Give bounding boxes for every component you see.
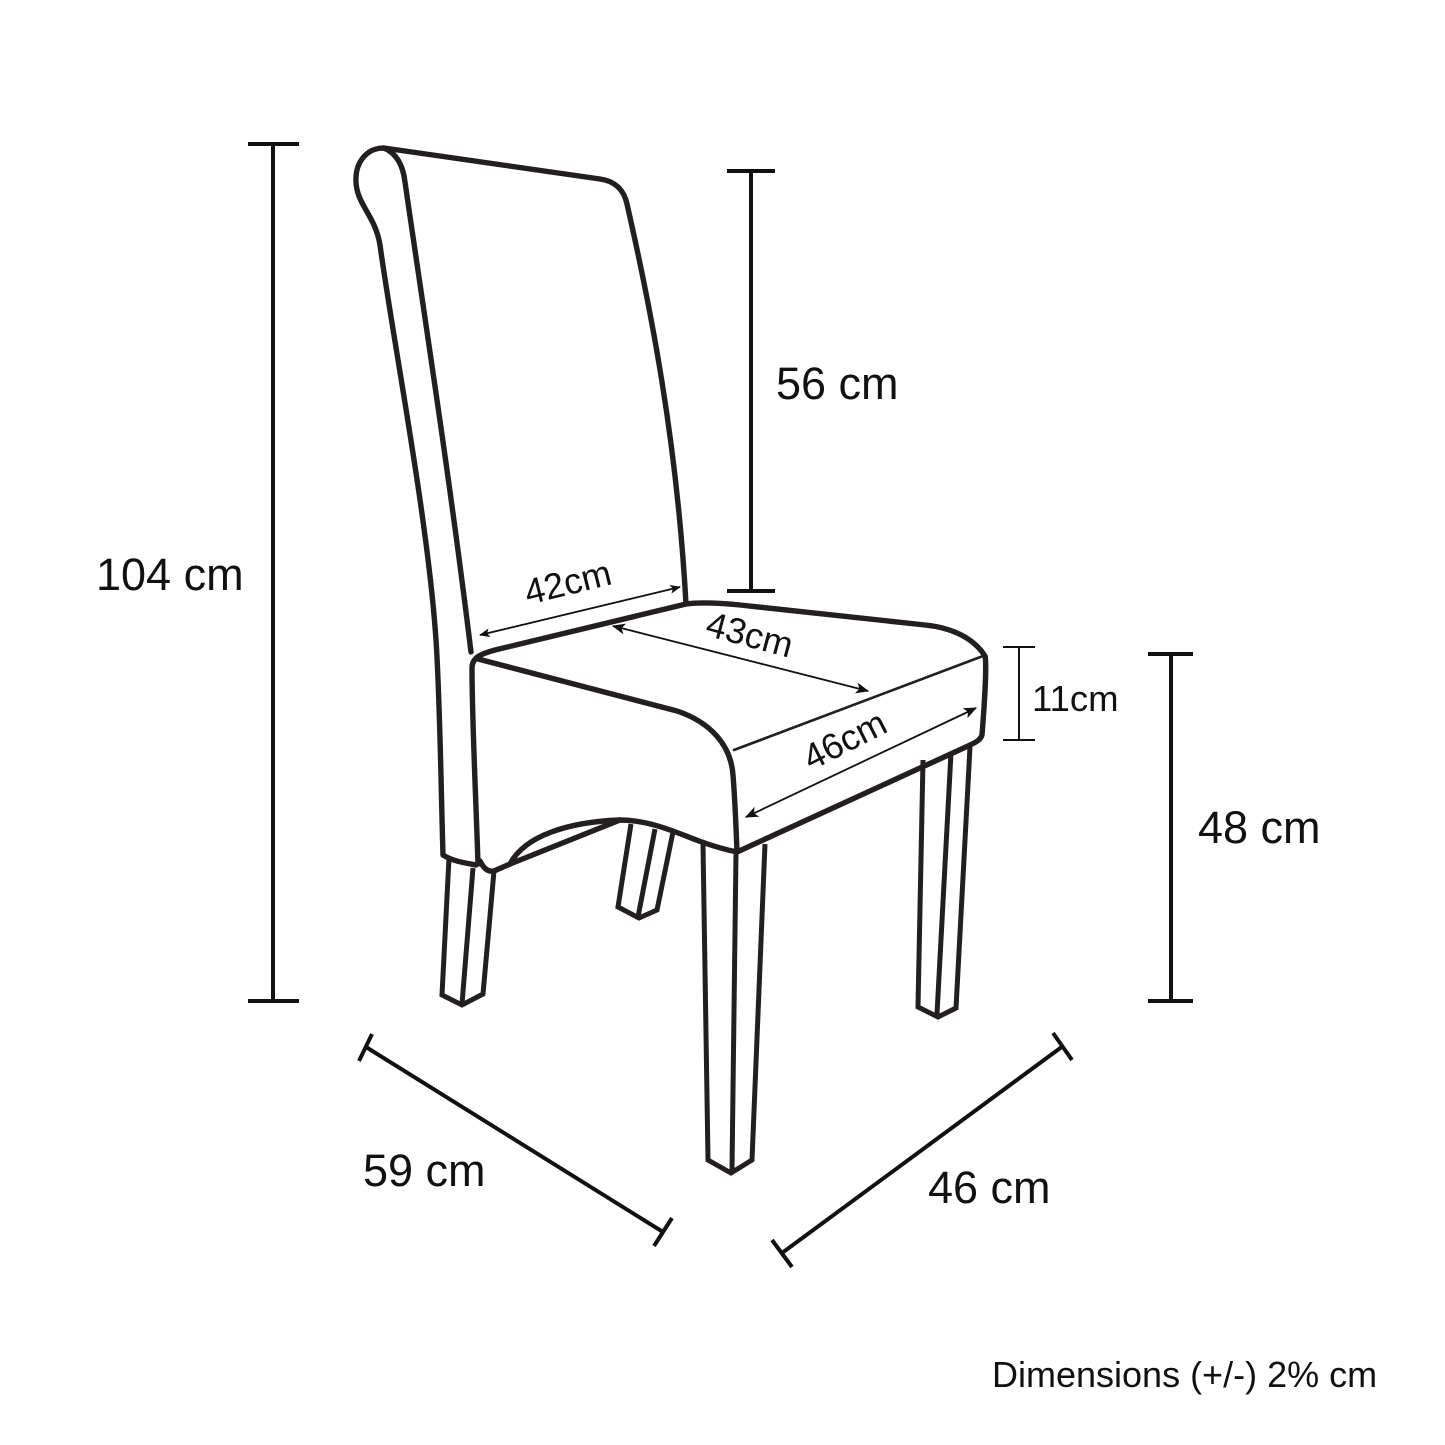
dimension: depth xyxy=(359,1034,672,1246)
chair seat xyxy=(472,603,986,864)
dimension: width xyxy=(772,1033,1072,1267)
chair line drawing xyxy=(356,148,986,1173)
seat front edge xyxy=(734,656,983,750)
dimension: seat thickness xyxy=(1003,647,1119,740)
dimension: seat thickness: 11cm xyxy=(1032,678,1119,719)
measure: seat width xyxy=(746,702,976,817)
dimension: seat height: 48 cm xyxy=(1198,802,1321,853)
measure: seat width: 46cm xyxy=(796,702,893,778)
dimension: back height: 56 cm xyxy=(776,358,899,409)
measure: seat depth xyxy=(613,603,868,691)
dimension: seat height xyxy=(1148,654,1321,1001)
footnote: Dimensions (+/-) 2% cm xyxy=(992,1354,1377,1395)
dimension: overall height: 104 cm xyxy=(96,549,244,600)
dimension: depth: 59 cm xyxy=(363,1145,486,1196)
measure: back width: 42cm xyxy=(520,552,615,613)
chair legs xyxy=(442,747,970,1173)
dimension: width: 46 cm xyxy=(928,1162,1051,1213)
measure: back width xyxy=(480,552,680,635)
measure: seat depth: 43cm xyxy=(702,603,798,666)
dimension: back height xyxy=(727,171,899,591)
chair back and side xyxy=(356,148,686,871)
dimension: overall height xyxy=(96,144,299,1001)
